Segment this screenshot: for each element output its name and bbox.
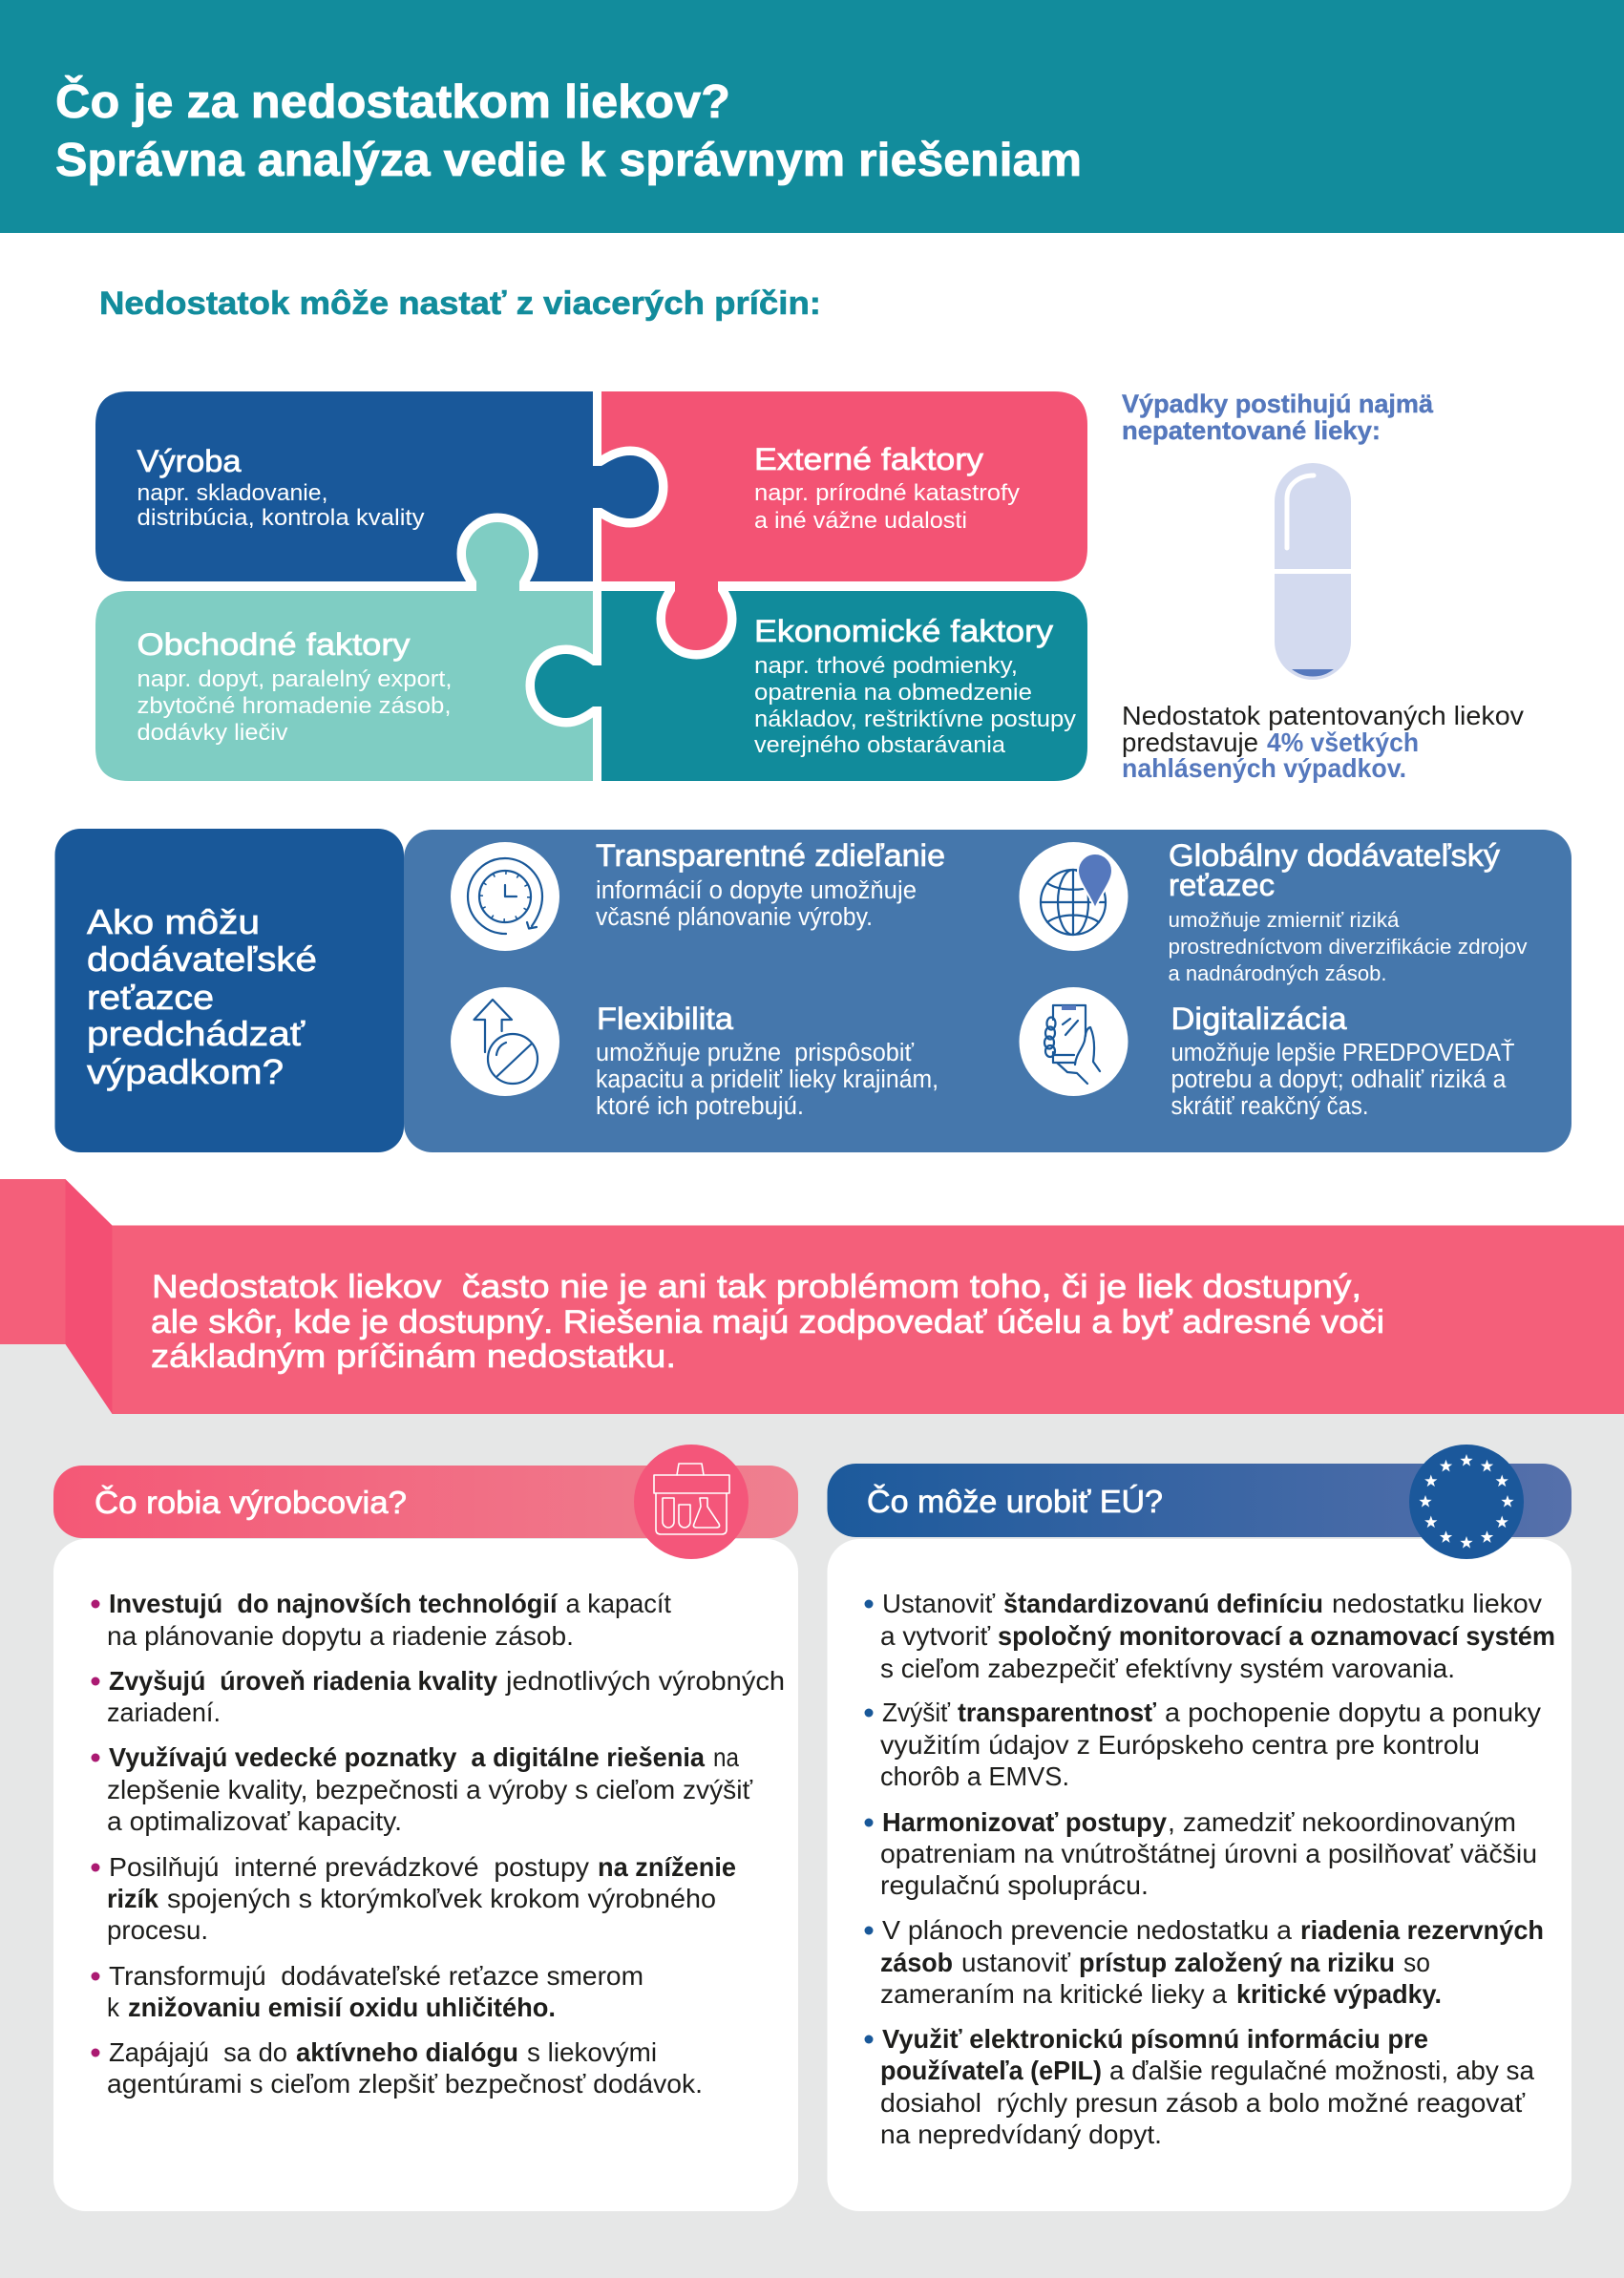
bullet: reserves: so: [1403, 1948, 1430, 1977]
icon: arrow and pill: [451, 987, 559, 1096]
bullet: quality: jednotlivých výrobných: [505, 1666, 785, 1696]
callout text: [1122, 701, 1524, 783]
bullet: emissions: Transformujú dodávateľské reťazce smerom: [109, 1961, 643, 1991]
bullet: definition: a vytvoriť: [880, 1621, 991, 1651]
bullet list: manufacturers: [92, 1589, 785, 2099]
puzzle piece: Externé faktory: a iné vážne udalosti: [754, 508, 967, 534]
puzzle knob: dark teal into light teal: [535, 654, 604, 718]
puzzle knob: blue into pink: [591, 455, 659, 518]
item: Globálny dodávateľský reťazec: a nadnárodných zásob.: [1169, 961, 1386, 985]
puzzle piece: Ekonomické faktory: nákladov, reštriktívne postupy: [754, 707, 1077, 732]
puzzle piece: Ekonomické faktory: napr. trhové podmienky,: [754, 653, 1018, 679]
puzzle piece: Obchodné faktory: zbytočné hromadenie zásob,: [137, 693, 452, 719]
banner text: základným príčinám nedostatku.: [151, 1339, 676, 1375]
puzzle knob: light teal into blue: [466, 522, 529, 594]
puzzle piece: Obchodné faktory: Obchodné faktory: [137, 627, 411, 662]
bullet: ePIL: a ďalšie regulačné možnosti, aby sa: [1109, 2056, 1535, 2085]
section heading: causes: Nedostatok môže nastať z viacerých príčin:: [99, 285, 821, 322]
bullet: risks: Posilňujú interné prevádzkové postupy: [109, 1852, 589, 1882]
bullet: reserves: kritické výpadky.: [1236, 1979, 1442, 2009]
bullet: dialogue: s liekovými: [527, 2037, 657, 2067]
bullet: definition: štandardizovanú definíciu: [1003, 1589, 1323, 1618]
title: Správna analýza vedie k správnym riešeniam: [55, 135, 1082, 186]
bullet: emissions: znižovaniu emisií oxidu uhličitého.: [128, 1993, 556, 2022]
panel: question box: predchádzať: [87, 1014, 306, 1053]
item: Transparentné zdieľanie: Transparentné zdieľanie: [596, 838, 945, 873]
bullet: definition: nedostatku liekov: [1332, 1589, 1542, 1618]
bullet: risks: [92, 1852, 736, 1945]
bullet: technologies: na plánovanie dopytu a riadenie zásob.: [107, 1621, 574, 1651]
panel heading: Čo môže urobiť EÚ?: [867, 1484, 1163, 1519]
panel: question box: dodávateľské: [87, 939, 317, 979]
item: Digitalizácia: umožňuje lepšie PREDPOVEDAŤ: [1171, 1039, 1514, 1066]
puzzle piece: Výroba: Výroba: [137, 444, 242, 478]
panel: question box: Ako môžu: [87, 902, 260, 941]
callout: non-patented medicines: [1122, 390, 1524, 783]
callout text: predstavuje: [1122, 728, 1258, 757]
bullet: reserves: zameraním na kritické lieky a: [880, 1979, 1228, 2009]
bullet: transparency: transparentnosť: [958, 1698, 1157, 1727]
puzzle piece: Obchodné faktory: dodávky liečiv: [137, 720, 288, 746]
panel header: [53, 1466, 798, 1538]
panel heading: Čo robia výrobcovia?: [95, 1485, 407, 1520]
item: Flexibilita: Flexibilita: [597, 1002, 733, 1036]
bullet: science: [92, 1742, 753, 1836]
bullet: science: Využívajú vedecké poznatky a digitálne riešenia: [109, 1742, 706, 1772]
bullet: ePIL: používateľa (ePIL): [880, 2056, 1102, 2085]
bullet: emissions: [92, 1961, 643, 2022]
puzzle piece: Ekonomické faktory: opatrenia na obmedzenie: [754, 680, 1032, 706]
item: Digitalizácia: potrebu a dopyt; odhaliť riziká a: [1171, 1066, 1507, 1093]
callout text: Nedostatok patentovaných liekov: [1122, 701, 1524, 730]
banner text: Nedostatok liekov často nie je ani tak problémom toho, či je liek dostupný,: [152, 1269, 1361, 1305]
puzzle piece: Výroba: [95, 391, 593, 581]
item: Digitalizácia: [1020, 987, 1514, 1120]
bullet: quality: zariadení.: [107, 1698, 221, 1727]
bullet: reserves: zásob: [880, 1948, 953, 1977]
bullet: risks: spojených s ktorýmkoľvek krokom výrobného: [167, 1884, 716, 1913]
title: [55, 75, 1082, 186]
bullet: risks: rizík: [107, 1884, 159, 1913]
icon: clock: [451, 842, 559, 951]
item: Globálny dodávateľský reťazec: [1020, 838, 1528, 985]
bullet: risks: procesu.: [107, 1915, 208, 1945]
bullet: quality: [92, 1666, 785, 1727]
panel header: [827, 1464, 1571, 1537]
puzzle piece: Obchodné faktory: napr. dopyt, paralelný export,: [137, 666, 453, 692]
banner text: [151, 1269, 1384, 1375]
item: Flexibilita: kapacitu a prideliť lieky krajinám,: [596, 1066, 939, 1093]
bullet: transparency: Zvýšiť: [882, 1698, 951, 1727]
item: Flexibilita: umožňuje pružne prispôsobiť: [596, 1040, 914, 1066]
bullet: quality: Zvyšujú úroveň riadenia kvality: [109, 1666, 498, 1696]
item: Transparentné zdieľanie: [451, 838, 945, 951]
bullet: dialogue: agentúrami s cieľom zlepšiť bezpečnosť dodávok.: [107, 2069, 703, 2099]
puzzle piece: Výroba: distribúcia, kontrola kvality: [137, 505, 425, 531]
item: Flexibilita: [451, 987, 939, 1120]
bullet: definition: Ustanoviť: [882, 1589, 996, 1618]
bullet: dialogue: aktívneho dialógu: [296, 2037, 518, 2067]
bullet: harmonise: opatreniam na vnútroštátnej úrovni a posilňovať väčšiu: [880, 1839, 1537, 1868]
panel body: [53, 1539, 798, 2211]
bullet: dialogue: Zapájajú sa do: [109, 2037, 287, 2067]
bullet: definition: spoločný monitorovací a oznamovací systém: [998, 1621, 1555, 1651]
bullet: definition: s cieľom zabezpečiť efektívny systém varovania.: [880, 1654, 1455, 1683]
bullet: definition: [865, 1589, 1555, 1683]
icon: phone in hand: [1020, 987, 1128, 1096]
bullet list: EU: [865, 1589, 1555, 2149]
bullet: science: zlepšenie kvality, bezpečnosti a výroby s cieľom zvýšiť: [107, 1775, 753, 1804]
bullet: harmonise: regulačnú spoluprácu.: [880, 1870, 1149, 1900]
item: Globálny dodávateľský reťazec: Globálny dodávateľský: [1169, 838, 1500, 873]
icon: capsule: [1275, 463, 1351, 680]
callout heading: [1122, 390, 1434, 445]
bullet: reserves: prístup založený na riziku: [1079, 1948, 1395, 1977]
item: Digitalizácia: skrátiť reakčný čas.: [1171, 1093, 1369, 1120]
item: Globálny dodávateľský reťazec: reťazec: [1169, 868, 1275, 902]
callout heading: Výpadky postihujú najmä: [1122, 390, 1434, 418]
title: Čo je za nedostatkom liekov?: [55, 75, 730, 128]
puzzle piece: Ekonomické faktory: Ekonomické faktory: [754, 614, 1053, 648]
panel: EU: [827, 1445, 1571, 2211]
bullet: risks: na zníženie: [598, 1852, 736, 1882]
item: Transparentné zdieľanie: informácií o dopyte umožňuje: [596, 877, 917, 904]
banner text: ale skôr, kde je dostupný. Riešenia majú zodpovedať účelu a byť adresné voči: [151, 1304, 1384, 1340]
icon: globe and pin: [1020, 842, 1128, 951]
bullet: transparency: chorôb a EMVS.: [880, 1761, 1069, 1791]
item: Globálny dodávateľský reťazec: prostredníctvom diverzifikácie zdrojov: [1169, 935, 1528, 959]
item: Flexibilita: ktoré ich potrebujú.: [596, 1093, 804, 1120]
bullet: technologies: [92, 1589, 671, 1651]
panel: question box: reťazce: [87, 978, 214, 1017]
bullet: ePIL: dosiahol rýchly presun zásob a bolo možné reagovať: [880, 2088, 1526, 2118]
callout text: nahlásených výpadkov.: [1122, 753, 1406, 783]
panel: question box: výpadkom?: [87, 1052, 284, 1091]
bullet: reserves: ustanoviť: [961, 1948, 1071, 1977]
bullet: harmonise: , zamedziť nekoordinovaným: [1168, 1807, 1516, 1837]
callout heading: nepatentované lieky:: [1122, 416, 1381, 445]
bullet: science: na: [713, 1742, 740, 1772]
bullet: science: a optimalizovať kapacity.: [107, 1806, 402, 1836]
puzzle piece: Výroba: napr. skladovanie,: [137, 480, 328, 506]
bullet: harmonise: [865, 1807, 1537, 1900]
item: Globálny dodávateľský reťazec: umožňuje zmierniť riziká: [1169, 908, 1400, 932]
puzzle of causes: [95, 391, 1087, 781]
item: Transparentné zdieľanie: včasné plánovanie výroby.: [596, 904, 873, 931]
panel body: [827, 1539, 1571, 2211]
bullet: emissions: k: [107, 1993, 119, 2022]
puzzle knob: pink into dark teal: [665, 579, 728, 650]
panel: question box: [55, 829, 404, 1152]
bullet: ePIL: Využiť elektronickú písomnú informáciu pre: [882, 2024, 1428, 2054]
bullet: reserves: V plánoch prevencie nedostatku a: [882, 1915, 1293, 1945]
bullet: technologies: a kapacít: [565, 1589, 671, 1618]
bullet: dialogue: [92, 2037, 703, 2099]
icon: lab case: [634, 1445, 749, 1559]
bullet: technologies: Investujú do najnovších technológií: [109, 1589, 559, 1618]
puzzle piece: Externé faktory: Externé faktory: [754, 442, 983, 476]
puzzle piece: Ekonomické faktory: [601, 591, 1087, 781]
item: Digitalizácia: Digitalizácia: [1171, 1002, 1347, 1036]
header band: [0, 0, 1624, 233]
panel: supply chain solutions: [404, 830, 1571, 1152]
bullet: harmonise: Harmonizovať postupy: [882, 1807, 1168, 1837]
puzzle piece: Externé faktory: [601, 391, 1087, 581]
bullet: transparency: a pochopenie dopytu a ponuky: [1165, 1698, 1541, 1727]
bullet: reserves: riadenia rezervných: [1300, 1915, 1544, 1945]
puzzle piece: Externé faktory: napr. prírodné katastrofy: [754, 480, 1021, 506]
callout text: 4% všetkých: [1267, 728, 1419, 757]
ribbon banner: [0, 1179, 1624, 1414]
icon: EU stars: [1409, 1445, 1524, 1559]
bullet: transparency: [865, 1698, 1541, 1791]
puzzle piece: Ekonomické faktory: verejného obstarávania: [754, 732, 1005, 758]
bullet: reserves: [865, 1915, 1544, 2009]
bullet: transparency: využitím údajov z Európskeho centra pre kontrolu: [880, 1730, 1480, 1760]
panel: manufacturers: [53, 1445, 798, 2211]
bullet: ePIL: [865, 2024, 1535, 2149]
bullet: ePIL: na nepredvídaný dopyt.: [880, 2120, 1162, 2149]
puzzle piece: Obchodné faktory: [95, 591, 593, 781]
